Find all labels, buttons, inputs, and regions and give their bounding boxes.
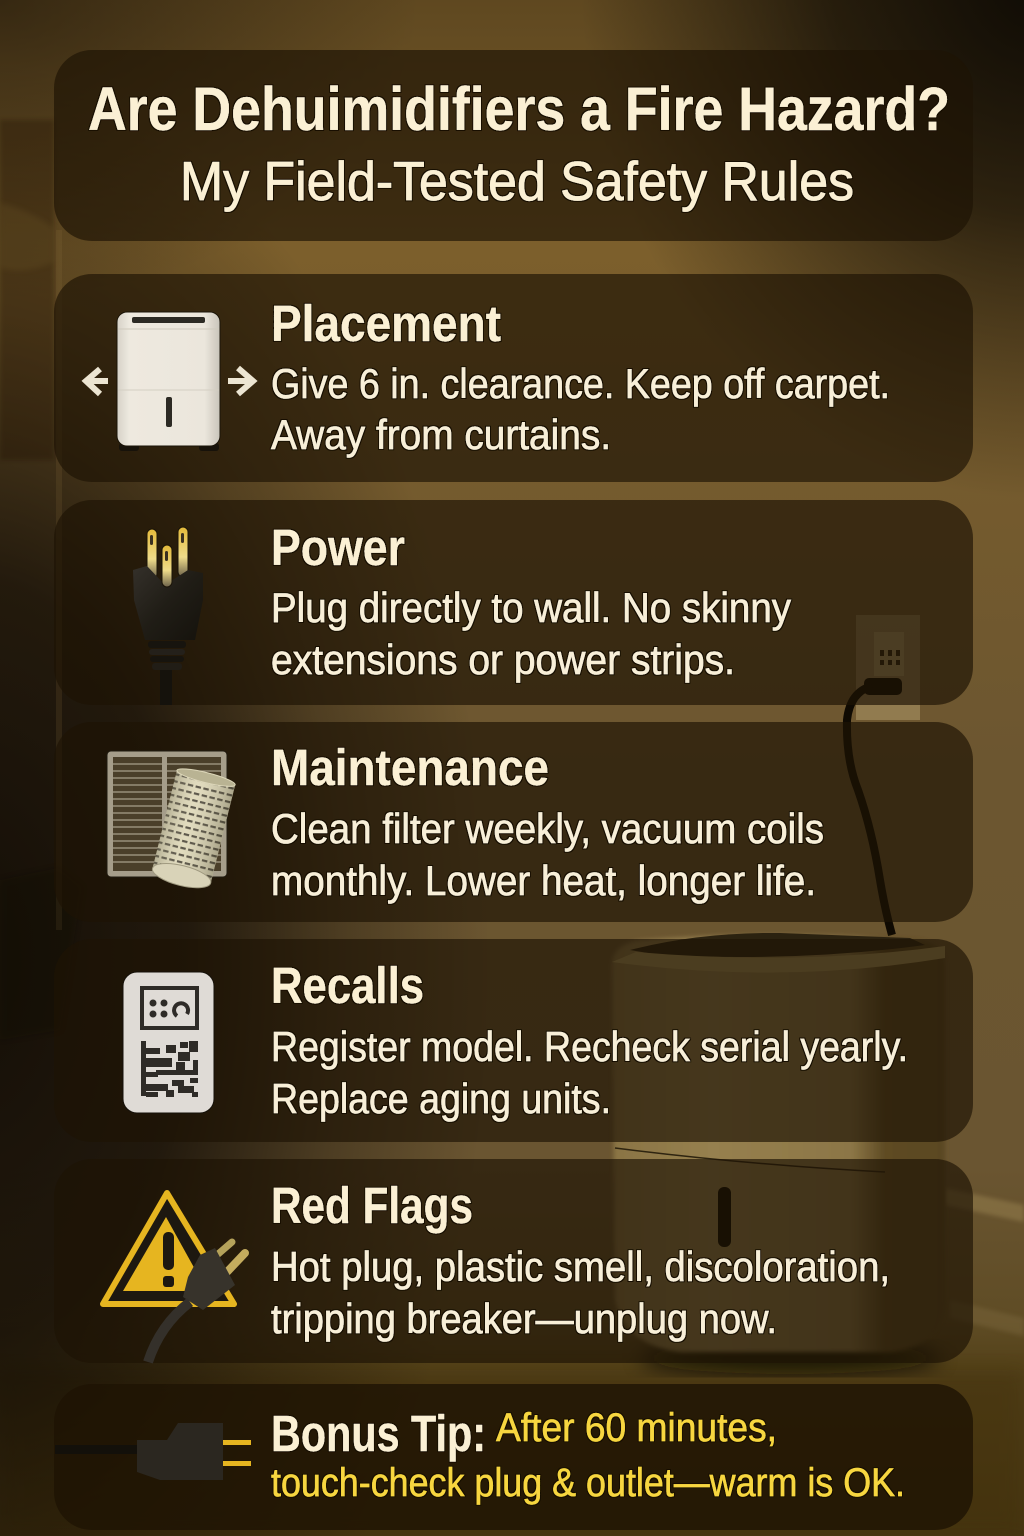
icon: filter grille and cylinder filter xyxy=(107,751,236,893)
text: bonus line 2: touch-check plug & outlet—warm is OK. xyxy=(271,1461,905,1505)
heading: recalls: Recalls xyxy=(271,957,424,1014)
panel: bonus tip xyxy=(54,1384,973,1530)
heading: maintenance: Maintenance xyxy=(271,739,549,796)
text: recalls line 1: Register model. Recheck serial yearly. xyxy=(271,1023,908,1070)
text: recalls line 2: Replace aging units. xyxy=(271,1075,611,1122)
panel: placement xyxy=(54,274,973,482)
icon: white dehumidifier with clearance arrows xyxy=(86,312,253,451)
panel: title xyxy=(54,50,973,241)
heading: title line 2: My Field-Tested Safety Rules xyxy=(180,150,854,212)
heading: bonus tip: Bonus Tip: xyxy=(271,1405,486,1462)
background: wall outlet and cord xyxy=(847,615,920,935)
icon: side-view plug xyxy=(55,1423,251,1480)
text: maintenance line 2: monthly. Lower heat, longer life. xyxy=(271,857,816,904)
icon: serial label with code xyxy=(123,972,214,1113)
text: power line 2: extensions or power strips. xyxy=(271,636,735,683)
panel: power xyxy=(54,500,973,705)
heading: placement: Placement xyxy=(271,295,501,352)
text: power line 1: Plug directly to wall. No skinny xyxy=(271,584,791,631)
panel: red flags xyxy=(54,1159,973,1363)
text: red flags line 1: Hot plug, plastic smell, discoloration, xyxy=(271,1243,890,1290)
text: red flags line 2: tripping breaker—unplug now. xyxy=(271,1295,777,1342)
icon: warning triangle with plug xyxy=(103,1193,245,1362)
panel: recalls xyxy=(54,939,973,1142)
heading: power: Power xyxy=(271,519,405,576)
panel: maintenance xyxy=(54,722,973,922)
text: maintenance line 1: Clean filter weekly, vacuum coils xyxy=(271,805,824,852)
background: dehumidifier unit xyxy=(612,933,945,1374)
heading: red flags: Red Flags xyxy=(271,1177,473,1234)
text: placement line 2: Away from curtains. xyxy=(271,411,611,458)
text: placement line 1: Give 6 in. clearance. Keep off carpet. xyxy=(271,360,890,407)
text: bonus line 1: After 60 minutes, xyxy=(496,1406,777,1450)
icon: three-prong plug xyxy=(133,527,203,705)
